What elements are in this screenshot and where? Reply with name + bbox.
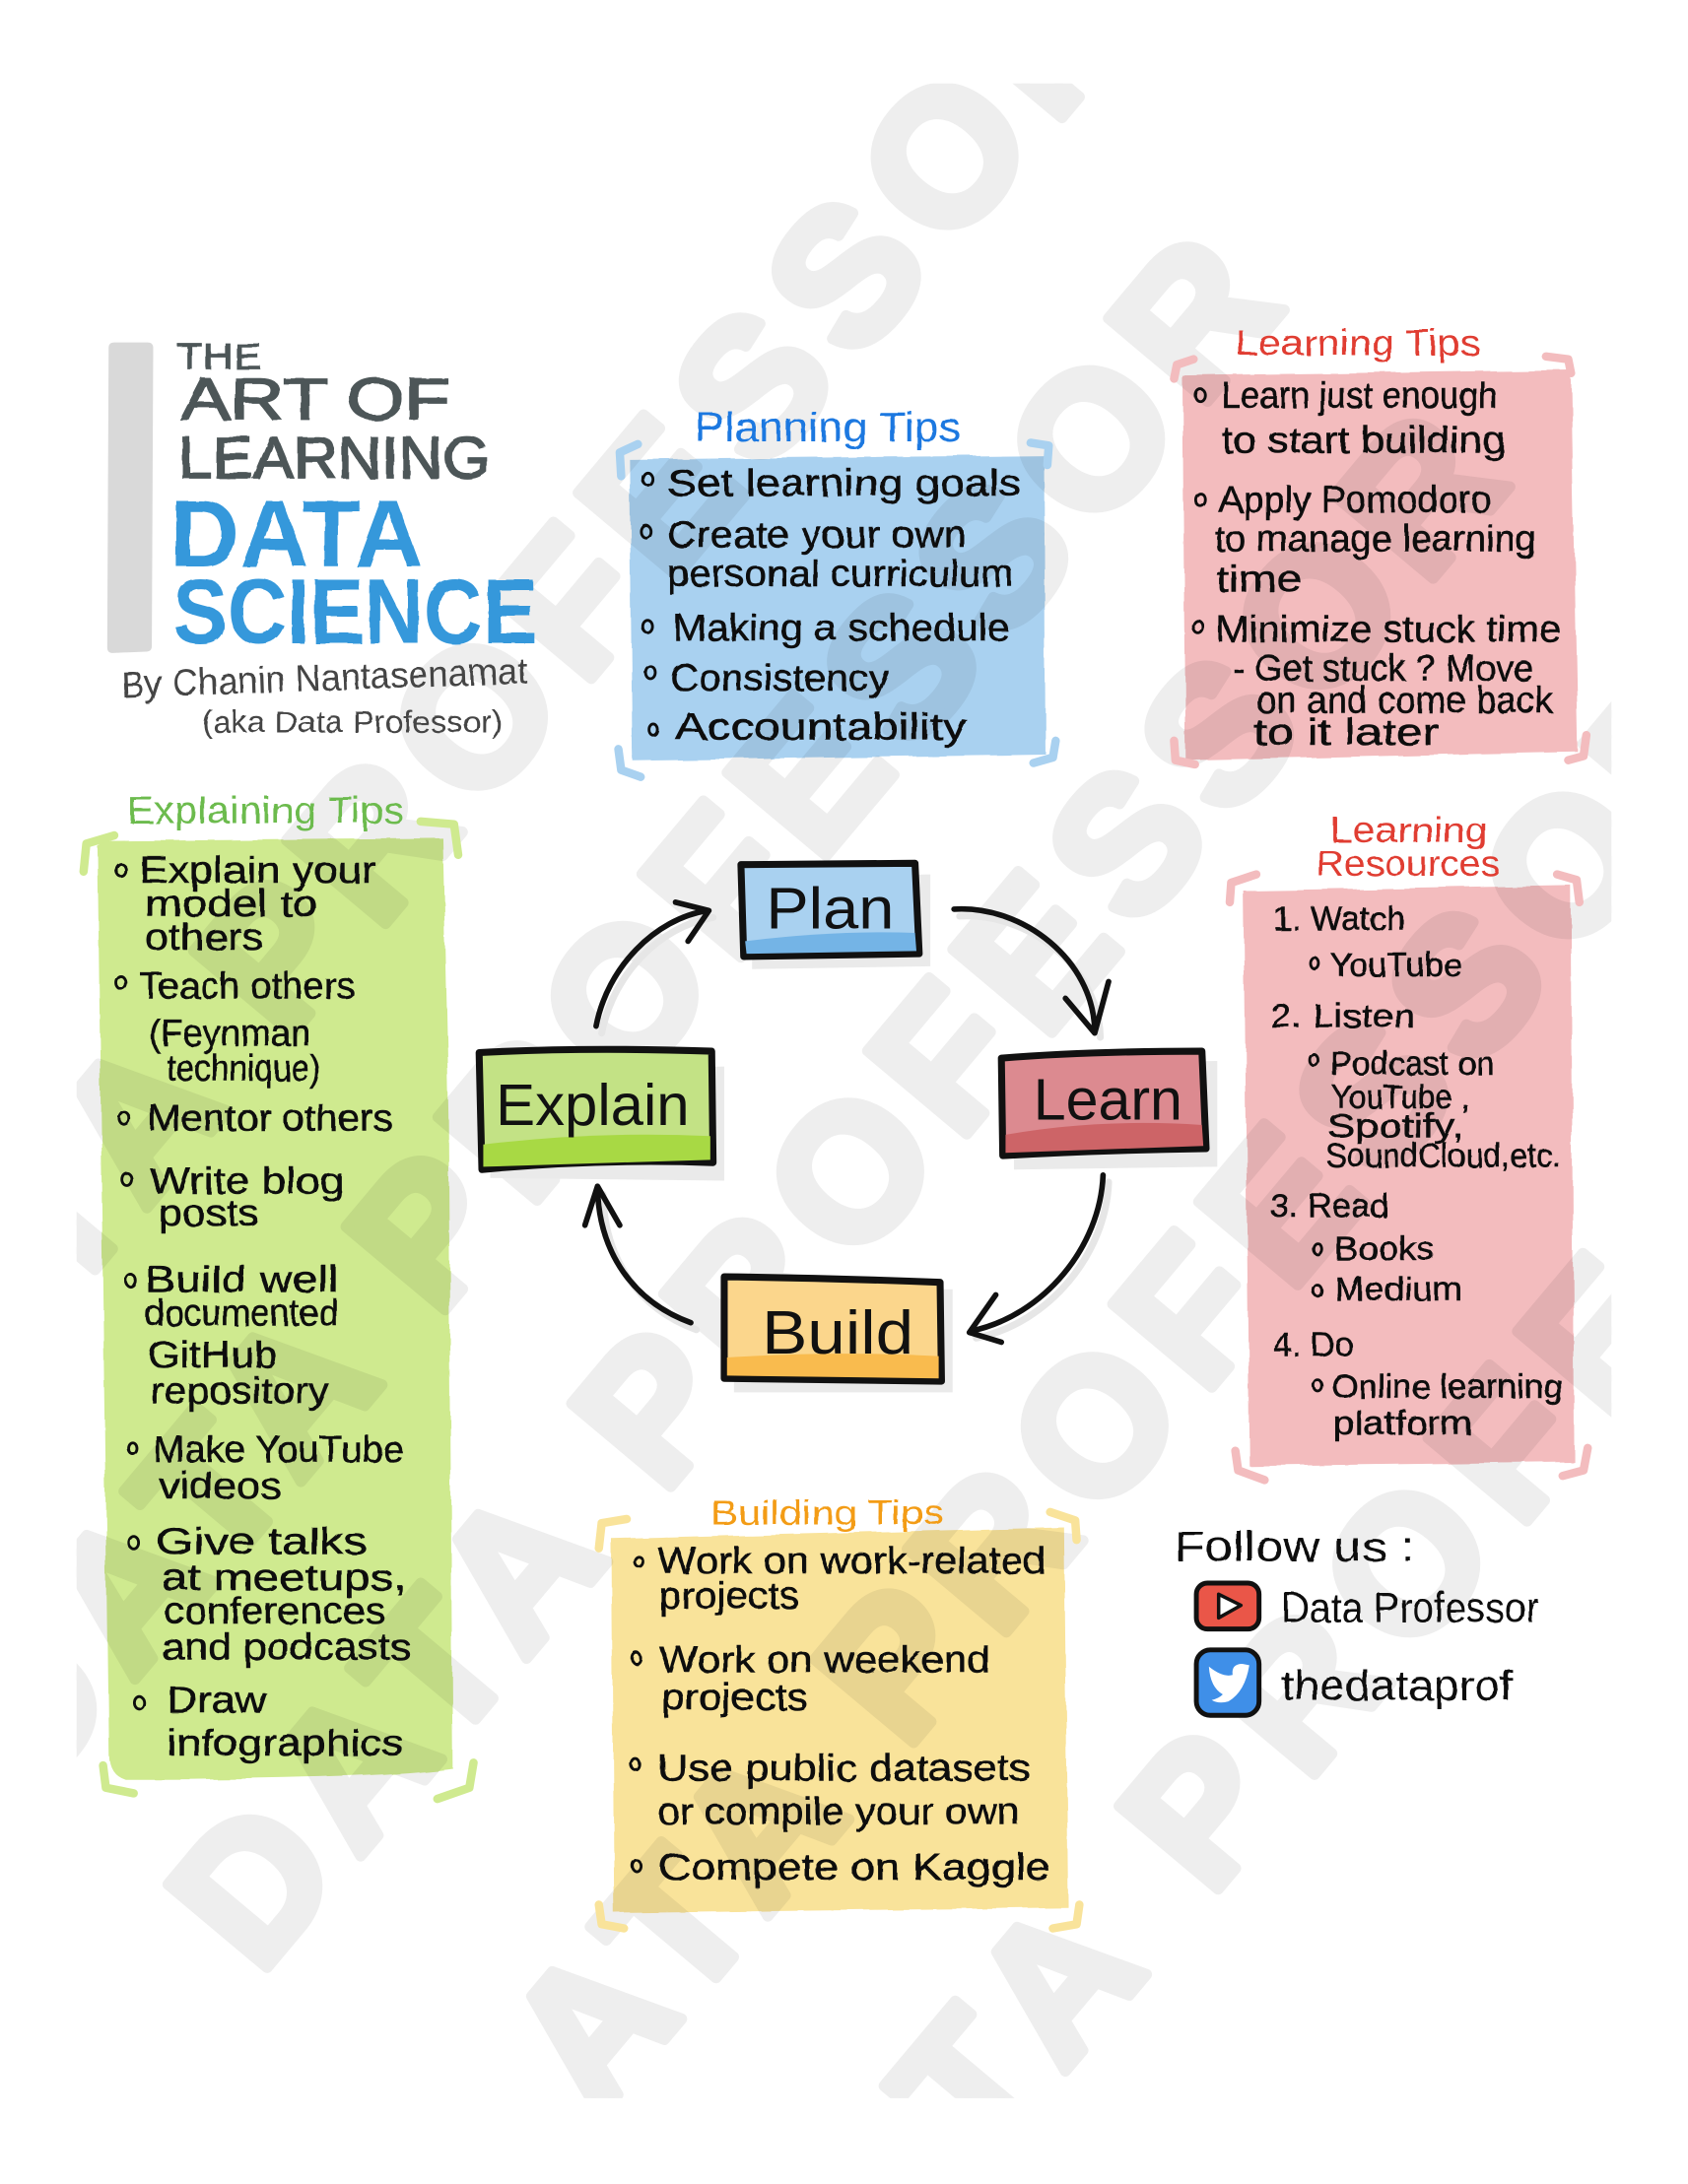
explaining list: repository [151, 1370, 329, 1413]
learning tips list: - Get stuck ? Move [1233, 647, 1533, 690]
building list: projects [659, 1574, 799, 1617]
explaining list: documented [145, 1292, 338, 1335]
planning list [641, 462, 1021, 748]
box: plan [741, 863, 930, 969]
explaining list: Explain your [139, 849, 376, 892]
follow heading: Follow us : [1174, 1523, 1415, 1569]
youtube label: Data Professor [1281, 1585, 1539, 1631]
author [120, 650, 528, 739]
resources heading: Learning [1330, 810, 1487, 850]
title text: THE [176, 337, 262, 377]
explaining brackets [84, 822, 474, 1799]
panel: learning resources [1230, 810, 1587, 1480]
explaining list: Write blog [149, 1159, 344, 1202]
explaining list: model to [145, 883, 317, 925]
title text [169, 337, 538, 663]
watermark: DATA PROFESSOR [129, 375, 1543, 2003]
box: build: Build [762, 1299, 913, 1367]
arrow: explain to plan [596, 902, 713, 1033]
resources brackets [1230, 875, 1587, 1480]
planning list: Consistency [670, 657, 889, 699]
explaining list: technique) [168, 1047, 320, 1090]
resources list: 4. Do [1273, 1327, 1354, 1364]
explaining box [98, 838, 452, 1779]
box: plan: Plan [766, 876, 894, 942]
resources box [1244, 886, 1574, 1466]
explaining list: (Feynman [149, 1012, 310, 1054]
box: explain: Explain [496, 1072, 690, 1138]
learning tips brackets [1174, 357, 1587, 764]
learning tips list: Learn just enough [1222, 374, 1497, 417]
author: (aka Data Professor) [202, 704, 503, 739]
building box [611, 1527, 1068, 1913]
arrow: build to explain [585, 1186, 697, 1330]
author: By Chanin Nantasenamat [120, 650, 528, 706]
resources list: Online learning [1331, 1368, 1563, 1406]
explaining list: Give talks [156, 1520, 368, 1562]
learning tips box [1182, 370, 1578, 761]
box: learn: Learn [1034, 1066, 1182, 1132]
resources heading [1317, 810, 1500, 884]
building list: Work on weekend [659, 1638, 990, 1681]
box: explain [479, 1049, 724, 1181]
planning heading: Planning Tips [695, 404, 961, 450]
learning tips list: to manage learning [1214, 518, 1536, 561]
panel: planning tips [619, 404, 1055, 777]
explaining list: GitHub [148, 1334, 277, 1376]
explaining list: Build well [145, 1259, 338, 1301]
resources list: Medium [1334, 1271, 1462, 1308]
learning tips list: Minimize stuck time [1216, 609, 1561, 651]
explaining list: at meetups, [162, 1556, 407, 1599]
resources list: Spotify, [1327, 1108, 1463, 1146]
learning tips list: time [1216, 559, 1302, 601]
panel: learning tips [1174, 322, 1587, 764]
explaining heading: Explaining Tips [127, 789, 404, 831]
explaining list: and podcasts [162, 1626, 411, 1669]
building heading: Building Tips [710, 1494, 944, 1533]
explaining list: posts [159, 1192, 259, 1234]
box: learn [1001, 1051, 1217, 1169]
explaining list: Make YouTube [153, 1428, 404, 1471]
resources list [1270, 900, 1563, 1442]
resources list: 3. Read [1270, 1187, 1388, 1224]
planning list: Accountability [675, 705, 967, 748]
resources list: Podcast on [1330, 1045, 1495, 1083]
resources list: 1. Watch [1273, 900, 1405, 938]
title text: LEARNING [178, 425, 491, 491]
follow us [1174, 1523, 1539, 1715]
box: build [724, 1277, 953, 1392]
icon: twitter [1196, 1650, 1259, 1715]
title text: DATA [169, 482, 424, 587]
planning list: Making a schedule [673, 607, 1010, 649]
explaining list: conferences [165, 1590, 386, 1632]
arrow: learn to build [970, 1175, 1109, 1342]
title text: ART OF [181, 365, 450, 431]
explaining list: infographics [168, 1722, 404, 1764]
building list: or compile your own [657, 1791, 1020, 1833]
learning tips heading: Learning Tips [1236, 322, 1480, 363]
resources list: YouTube [1330, 947, 1462, 984]
building list: Use public datasets [657, 1748, 1031, 1790]
resources list: Books [1334, 1230, 1435, 1268]
explaining list: videos [159, 1465, 282, 1507]
icon: youtube [1196, 1583, 1259, 1629]
planning list: Create your own [667, 513, 967, 556]
explaining list [116, 849, 411, 1764]
planning panel box [630, 455, 1046, 761]
arrow: plan to learn [954, 909, 1109, 1037]
twitter label: thedataprof [1281, 1663, 1513, 1709]
building list: Compete on Kaggle [659, 1846, 1050, 1888]
title text: SCIENCE [172, 561, 538, 663]
resources list: platform [1333, 1405, 1472, 1442]
learning tips list: on and come back [1256, 680, 1554, 722]
learning tips list: to it later [1253, 711, 1439, 754]
resources heading: Resources [1317, 843, 1500, 884]
resources list: SoundCloud,etc. [1326, 1137, 1561, 1174]
planning corner brackets [619, 442, 1055, 777]
planning list: personal curriculum [667, 553, 1014, 595]
title accent bar [107, 343, 153, 653]
learning tips list: Apply Pomodoro [1219, 479, 1492, 521]
explaining list: Mentor others [148, 1097, 393, 1140]
explaining list: Teach others [139, 964, 355, 1007]
planning list: Set learning goals [667, 462, 1021, 504]
panel: explaining tips [84, 789, 474, 1799]
building list: Work on work-related [657, 1540, 1046, 1582]
learning tips list [1193, 374, 1561, 754]
building list: projects [661, 1677, 808, 1719]
process cycle [479, 863, 1217, 1392]
learning tips list: to start building [1222, 419, 1506, 461]
explaining list: others [145, 916, 263, 959]
title block [107, 337, 538, 739]
resources list: YouTube , [1331, 1079, 1469, 1116]
panel: building tips [599, 1494, 1079, 1929]
resources list: 2. Listen [1270, 998, 1415, 1035]
building brackets [599, 1512, 1079, 1929]
explaining list: Draw [168, 1679, 266, 1721]
building list [631, 1540, 1050, 1888]
